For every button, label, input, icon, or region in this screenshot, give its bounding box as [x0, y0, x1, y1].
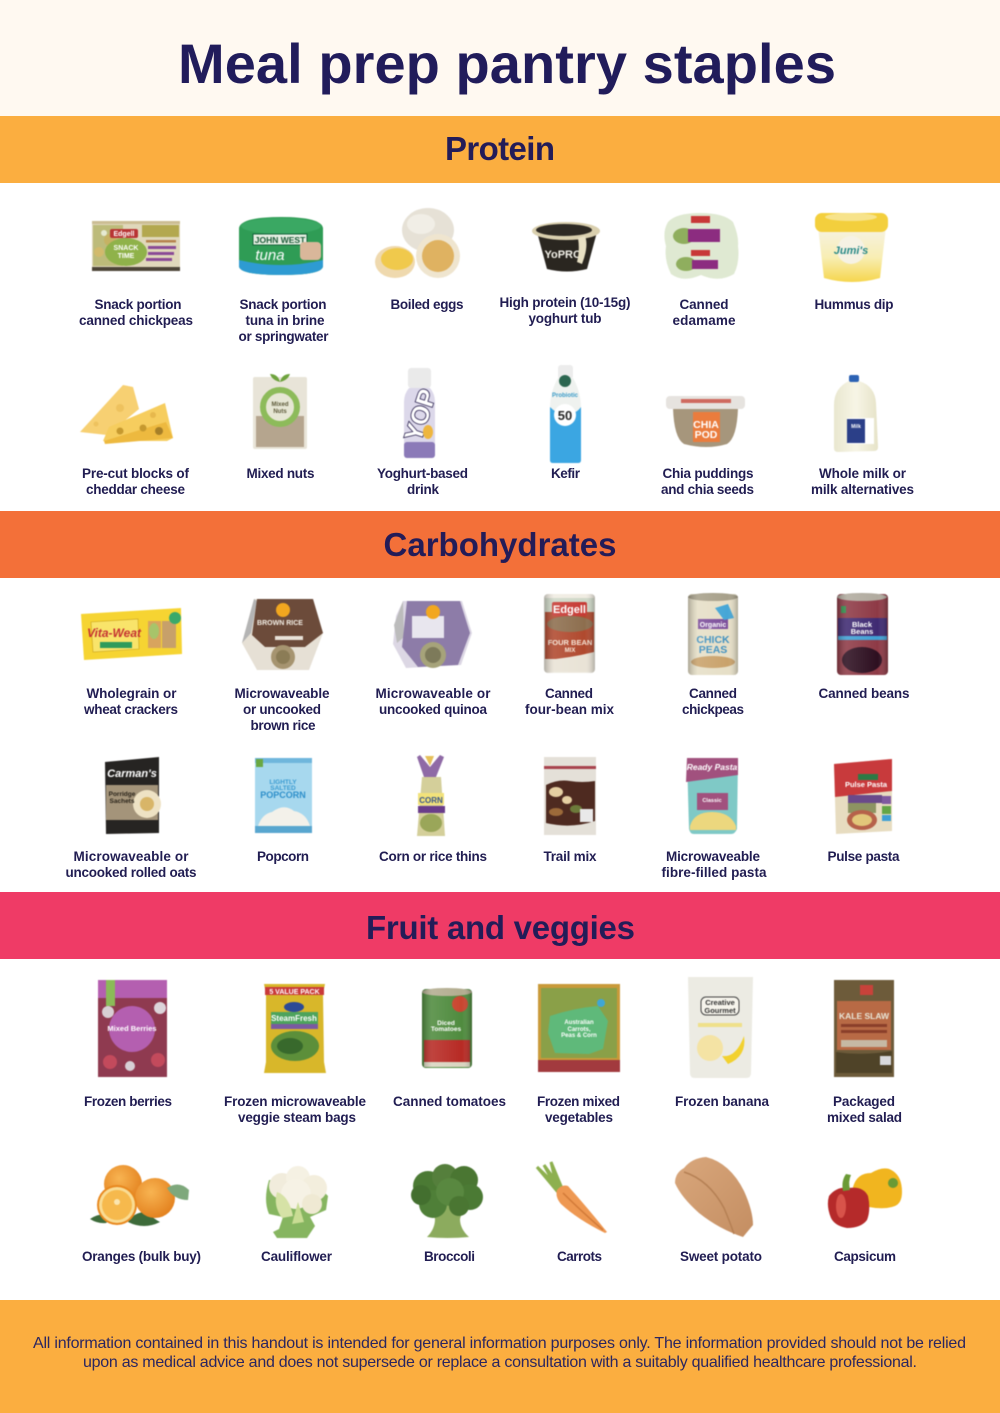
label: whole milk: milk alternatives	[811, 482, 914, 497]
disclaimer text	[33, 1335, 966, 1371]
label: oranges: Oranges (bulk buy)	[82, 1249, 201, 1264]
label: frozen berries: Frozen berries	[84, 1094, 172, 1109]
label: frozen banana: Frozen banana	[675, 1094, 769, 1109]
item: wholegrain crackers	[81, 608, 182, 717]
item: frozen mixed vegetables	[537, 984, 620, 1125]
icon: black beans can: Beans	[851, 627, 873, 636]
label: chia puddings	[661, 466, 754, 497]
item: fibre-filled pasta	[662, 758, 767, 880]
icon: porridge sachets box	[105, 757, 161, 834]
icon: sweet potato	[675, 1157, 753, 1237]
icon: popcorn bag: POPCORN	[260, 790, 306, 800]
label: trail mix: Trail mix	[544, 849, 597, 864]
item: canned tomatoes	[393, 988, 506, 1109]
icon: veggie steam bag	[264, 984, 326, 1073]
label: high protein yoghurt tub: yoghurt tub	[528, 311, 602, 326]
label: fibre-filled pasta	[662, 849, 767, 880]
label: whole milk	[811, 466, 914, 497]
label: sweet potato: Sweet potato	[680, 1249, 762, 1264]
label: steam bags: Frozen microwaveable	[224, 1094, 366, 1109]
label: wholegrain crackers	[83, 686, 178, 717]
label: whole milk: Whole milk or	[819, 466, 907, 481]
icon: frozen banana pouch	[688, 977, 753, 1078]
label: snack portion tuna: or springwater	[238, 329, 329, 344]
label: canned chickpeas: Canned	[689, 686, 737, 701]
icon: capsicum	[828, 1168, 902, 1228]
icon: mixed veg bag	[538, 984, 620, 1072]
item: packaged mixed salad	[827, 980, 902, 1125]
icon: boiled eggs	[375, 208, 460, 278]
item: canned edamame	[664, 213, 738, 328]
item: quinoa	[376, 601, 491, 717]
item: popcorn	[255, 758, 312, 864]
item: whole milk	[811, 375, 914, 497]
item: mixed nuts	[246, 374, 314, 481]
label: corn thins: Corn or rice thins	[379, 849, 487, 864]
label: fibre-filled pasta: Microwaveable	[666, 849, 760, 864]
icon: chia pod: POD	[695, 429, 718, 441]
icon: kale slaw bag: KALE SLAW	[839, 1011, 890, 1021]
icon: quinoa pouch	[393, 601, 472, 668]
panel: fruit and veggies	[0, 892, 1000, 1264]
item: broccoli	[411, 1164, 483, 1264]
label: canned beans: Canned beans	[818, 686, 910, 701]
label: rolled oats: uncooked rolled oats	[66, 865, 196, 880]
label: yoghurt-based drink	[377, 466, 468, 497]
label: snack portion tuna	[238, 297, 329, 344]
item: boiled eggs	[375, 208, 464, 312]
icon: kefir bottle: 50	[558, 408, 572, 423]
disclaimer text: All information contained in this handout is intended for general information purposes only. The information provided should not be relied	[33, 1335, 966, 1352]
icon: frozen berries bag: Mixed Berries	[107, 1024, 157, 1033]
icon: four bean can	[544, 594, 595, 673]
label: snack portion tuna: Snack portion	[240, 297, 326, 312]
icon: popcorn bag: LIGHTLY	[269, 779, 297, 786]
icon: ready pasta pouch	[686, 758, 738, 834]
disclaimer text: upon as medical advice and does not supersede or replace a consultation with a suitably qualified healthcare professional.	[83, 1354, 917, 1371]
label: yoghurt-based drink: Yoghurt-based	[377, 466, 468, 481]
icon: tomato can: Diced	[437, 1020, 455, 1027]
label: wholegrain crackers: Wholegrain or	[86, 686, 177, 701]
heading band: fruit and veggies: Fruit and veggies	[366, 909, 635, 946]
heading band: protein	[0, 116, 1000, 183]
item: kefir	[550, 365, 581, 481]
label: rolled oats: Microwaveable or	[74, 849, 189, 864]
icon: frozen banana pouch: Creative	[705, 998, 735, 1007]
item: cauliflower	[261, 1166, 333, 1264]
header band	[0, 0, 1000, 116]
label: canned chickpeas	[682, 686, 744, 717]
label: capsicum: Capsicum	[834, 1249, 896, 1264]
label: snack portion canned chickpeas: canned chickpeas	[79, 313, 193, 328]
label: carrots: Carrots	[557, 1249, 602, 1264]
label: canned edamame	[672, 297, 736, 328]
item: yoghurt-based drink	[377, 368, 468, 497]
label: packaged mixed salad: mixed salad	[827, 1110, 902, 1125]
label: snack portion canned chickpeas: Snack portion	[94, 297, 182, 312]
label: canned tomatoes: Canned tomatoes	[393, 1094, 506, 1109]
icon: ready pasta pouch: Ready Pasta	[687, 762, 738, 772]
label: quinoa: Microwaveable or	[376, 686, 491, 701]
item: hummus dip	[814, 213, 894, 312]
label: mixed nuts: Mixed nuts	[246, 466, 314, 481]
icon: chickpea snack can: TIME	[118, 253, 135, 260]
icon: oranges	[90, 1165, 189, 1226]
label: brown rice: or uncooked	[243, 702, 321, 717]
icon: milk jug: Milk	[851, 424, 861, 430]
label: high protein yoghurt tub: High protein (10-15g)	[500, 295, 630, 310]
icon: yoghurt tub: YoPRO	[544, 249, 582, 261]
label: four-bean mix: Canned	[545, 686, 593, 701]
label: hummus dip: Hummus dip	[814, 297, 894, 312]
icon: mixed veg bag: Peas & Corn	[561, 1033, 597, 1039]
icon: chickpea snack can: Edgell	[113, 231, 135, 238]
icon: vita-weat box: Vita-Weat	[87, 626, 142, 640]
label: canned chickpeas: chickpeas	[682, 702, 744, 717]
footer disclaimer band	[0, 1300, 1000, 1413]
label: frozen mixed vegetables: vegetables	[545, 1110, 613, 1125]
item: cheddar cheese	[80, 385, 190, 497]
icon: pulse pasta box: Pulse Pasta	[845, 780, 888, 789]
label: rolled oats	[66, 849, 196, 880]
label: pulse pasta: Pulse pasta	[828, 849, 900, 864]
label: cheddar cheese	[82, 466, 190, 497]
item: canned beans	[818, 593, 910, 701]
item: canned chickpeas	[682, 593, 744, 717]
icon: organic chickpea can: CHICK	[696, 634, 730, 646]
icon: chia pod: CHIA	[693, 419, 719, 431]
icon: popcorn bag	[255, 758, 312, 833]
icon: broccoli	[411, 1164, 483, 1238]
label: popcorn: Popcorn	[257, 849, 309, 864]
icon: porridge sachets box: Porridge	[109, 791, 136, 798]
heading band: carbohydrates: Carbohydrates	[384, 526, 616, 563]
icon: tomato can: Tomatoes	[431, 1026, 461, 1033]
label: cauliflower: Cauliflower	[261, 1249, 333, 1264]
panel: protein	[0, 116, 1000, 497]
icon: tuna can	[239, 217, 323, 275]
icon: trail mix bag	[544, 757, 596, 835]
label: steam bags: veggie steam bags	[238, 1110, 356, 1125]
icon: mixed veg bag: Carrots,	[567, 1027, 591, 1033]
icon: kefir bottle	[550, 365, 581, 463]
label: frozen mixed vegetables	[537, 1094, 620, 1125]
label: fibre-filled pasta: fibre-filled pasta	[662, 865, 767, 880]
icon: porridge sachets box: Carman's	[107, 768, 157, 780]
title: Meal prep pantry staples	[178, 32, 836, 95]
icon: tomato can	[422, 988, 472, 1068]
icon: mixed nuts bag	[253, 374, 307, 449]
icon: cauliflower	[266, 1166, 328, 1238]
heading band: protein: Protein	[445, 130, 555, 167]
item: oranges	[82, 1165, 201, 1264]
icon: carrots	[537, 1162, 607, 1233]
label: canned edamame: Canned	[680, 297, 728, 312]
icon: kefir bottle: Probiotic	[552, 393, 579, 399]
label: boiled eggs: Boiled eggs	[390, 297, 464, 312]
item: snack portion canned chickpeas	[79, 221, 193, 328]
icon: ready pasta pouch: Classic	[702, 798, 722, 804]
label: chia puddings: Chia puddings	[662, 466, 754, 481]
item: pulse pasta	[828, 759, 900, 864]
icon: four bean can: MIX	[565, 648, 575, 654]
label: cheddar cheese: cheddar cheese	[86, 482, 185, 497]
icon: mixed veg bag: Australian	[564, 1020, 594, 1026]
icon: chia pod	[666, 396, 745, 447]
label: chia puddings: and chia seeds	[661, 482, 754, 497]
icon: organic chickpea can: PEAS	[699, 644, 727, 656]
icon: brown rice pouch: BROWN RICE	[257, 620, 303, 627]
icon: veggie steam bag: 5 VALUE PACK	[269, 989, 320, 996]
icon: black beans can: Black	[852, 620, 873, 629]
icon: four bean can: FOUR BEAN	[548, 638, 592, 647]
icon: yop drink bottle: YOP	[399, 386, 442, 445]
label: frozen mixed vegetables: Frozen mixed	[537, 1094, 620, 1109]
label: steam bags	[224, 1094, 366, 1125]
panel: carbohydrates	[0, 511, 1000, 880]
icon: chickpea snack can: SNACK	[114, 245, 138, 252]
icon: kale slaw bag	[834, 980, 894, 1077]
item: capsicum	[828, 1168, 902, 1264]
icon: organic chickpea can: Organic	[700, 622, 726, 629]
icon: cheese blocks	[80, 385, 173, 444]
item: rolled oats	[66, 757, 196, 880]
icon: popcorn bag: SALTED	[270, 785, 296, 792]
icon: four bean can: Edgell	[553, 604, 586, 616]
label: cheddar cheese: Pre-cut blocks of	[82, 466, 190, 481]
icon: organic chickpea can	[688, 593, 738, 675]
item: carrots	[537, 1162, 607, 1264]
item: sweet potato	[675, 1157, 762, 1264]
icon: frozen banana pouch: Gourmet	[704, 1006, 736, 1015]
label: snack portion canned chickpeas	[79, 297, 193, 328]
item: frozen berries	[84, 980, 172, 1109]
item: high protein yoghurt tub	[500, 222, 630, 326]
icon: mixed nuts bag: Nuts	[273, 409, 287, 415]
icon: tuna can: tuna	[255, 247, 285, 264]
icon: edamame cans	[664, 213, 738, 279]
item: chia puddings	[661, 396, 754, 497]
icon: hummus tub: Jumi's	[834, 245, 868, 257]
label: yoghurt-based drink: drink	[407, 482, 439, 497]
heading band: fruit and veggies	[0, 892, 1000, 959]
label: canned edamame: edamame	[672, 313, 736, 328]
icon: corn thins pack: CORN	[419, 796, 443, 805]
label: snack portion tuna: tuna in brine	[246, 313, 325, 328]
label: quinoa: uncooked quinoa	[379, 702, 487, 717]
label: quinoa	[376, 686, 491, 717]
label: four-bean mix: four-bean mix	[525, 702, 614, 717]
icon: mixed nuts bag: Mixed	[271, 402, 289, 408]
icon: chickpea snack can	[92, 221, 180, 271]
item: brown rice	[234, 599, 330, 733]
label: high protein yoghurt tub	[500, 295, 630, 326]
label: brown rice	[234, 686, 330, 733]
icon: tuna can: JOHN WEST	[255, 235, 306, 245]
label: wholegrain crackers: wheat crackers	[83, 702, 178, 717]
label: packaged mixed salad	[827, 1094, 902, 1125]
label: packaged mixed salad: Packaged	[833, 1094, 895, 1109]
item: four-bean mix	[525, 594, 614, 717]
item: snack portion tuna	[238, 217, 329, 344]
item: trail mix	[544, 757, 597, 864]
icon: black beans can	[837, 593, 888, 675]
label: brown rice: brown rice	[250, 718, 316, 733]
label: broccoli: Broccoli	[424, 1249, 475, 1264]
item: steam bags	[224, 984, 366, 1125]
label: kefir: Kefir	[551, 466, 581, 481]
icon: veggie steam bag: SteamFresh	[271, 1014, 317, 1023]
label: four-bean mix	[525, 686, 614, 717]
icon: porridge sachets box: Sachets	[110, 798, 135, 805]
item: frozen banana	[675, 977, 769, 1109]
label: brown rice: Microwaveable	[234, 686, 330, 701]
heading band: carbohydrates	[0, 511, 1000, 578]
item: corn thins	[379, 755, 487, 864]
